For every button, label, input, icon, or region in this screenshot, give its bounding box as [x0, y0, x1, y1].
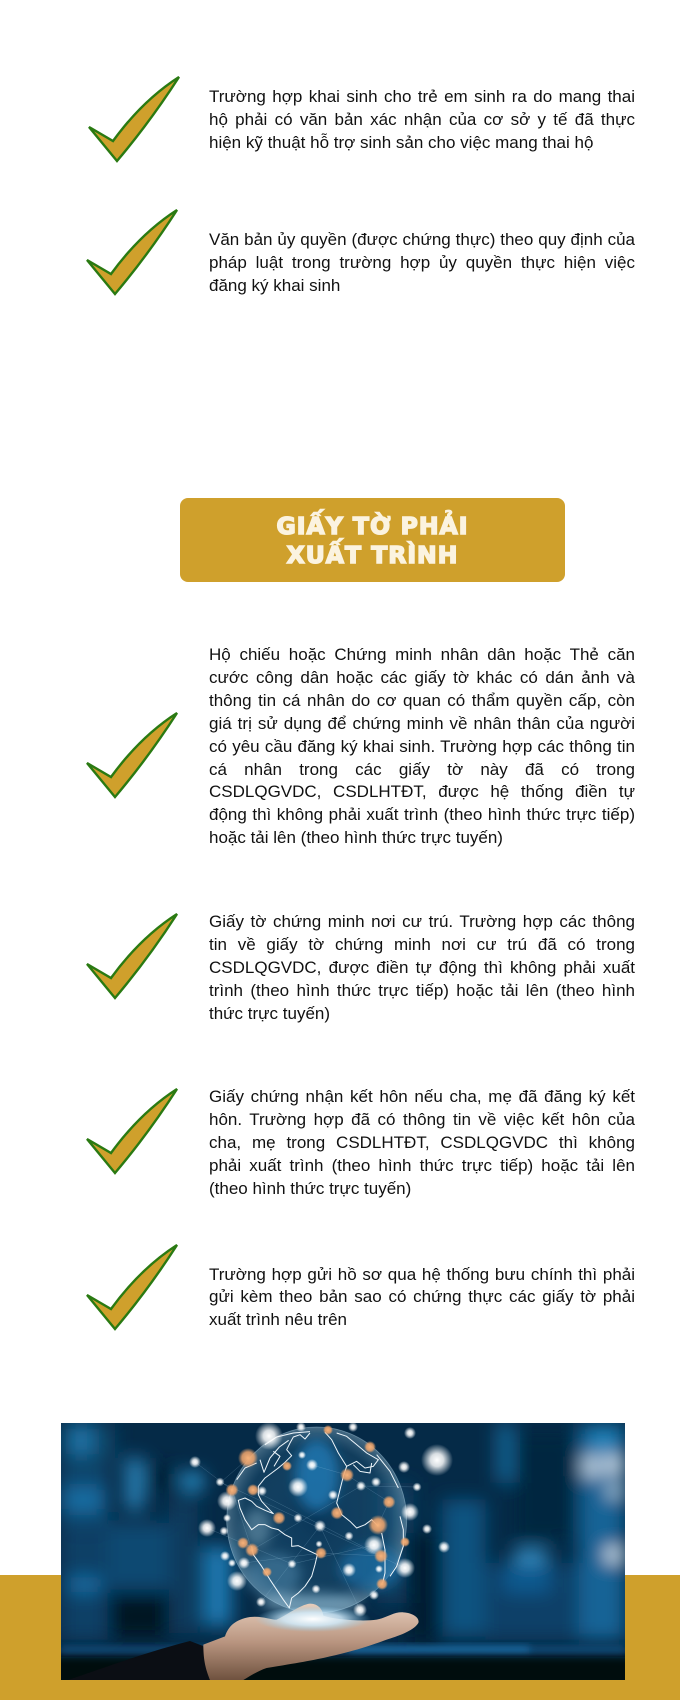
text: marriage certificate: Giấy chứng nhận kết hôn nếu cha, mẹ đã đăng ký kết	[209, 1087, 635, 1106]
text: identity documents: giá trị sử dụng để chứng minh về nhân thân của người	[209, 714, 635, 733]
text: identity documents: động thì không phải xuất trình (theo hình thức trực tiếp)	[209, 805, 635, 824]
icon: check mark 5	[86, 1088, 178, 1175]
text: first requirement: hiện kỹ thuật hỗ trợ sinh sản cho việc mang thai hộ	[209, 133, 593, 152]
text: second requirement: đăng ký khai sinh	[209, 276, 340, 295]
text: marriage certificate: cha, mẹ trong CSDLHTĐT, CSDLQGVDC thì không	[209, 1133, 635, 1152]
text: marriage certificate: hôn. Trường hợp đã có thông tin về việc kết hôn của	[209, 1110, 635, 1129]
globe	[195, 1427, 417, 1613]
text: identity documents: có yêu cầu đăng ký khai sinh. Trường hợp các thông tin	[209, 737, 635, 756]
text: residence documents: trình (theo hình thức trực tiếp) hoặc tải lên (theo hình	[209, 981, 635, 1000]
text: residence documents: Giấy tờ chứng minh nơi cư trú. Trường hợp các thông	[209, 912, 635, 931]
text: second requirement: pháp luật trong trường hợp ủy quyền thực hiện việc	[209, 253, 635, 272]
text: identity documents	[209, 645, 635, 847]
text: identity documents: hoặc tải lên (theo hình thức trực tuyến)	[209, 828, 503, 847]
text: second requirement: Văn bản ủy quyền (được chứng thực) theo quy định của	[209, 230, 635, 249]
text: postal submission	[209, 1264, 635, 1329]
continents	[237, 1432, 403, 1608]
text: postal submission: Trường hợp gửi hồ sơ qua hệ thống bưu chính thì phải	[209, 1264, 635, 1284]
network lines	[195, 1443, 417, 1610]
text: second requirement	[209, 230, 635, 295]
icon: check mark 2	[86, 209, 178, 296]
text: postal submission: xuất trình nêu trên	[209, 1310, 347, 1329]
palm glow	[255, 1606, 371, 1632]
text: residence documents	[209, 912, 635, 1023]
icon: check mark 1	[88, 76, 180, 163]
icon: check mark 6	[86, 1244, 178, 1331]
background	[61, 1423, 625, 1680]
heading: documents to present	[180, 498, 565, 582]
text: marriage certificate: phải xuất trình (theo hình thức trực tiếp) hoặc tải lên	[209, 1156, 635, 1175]
icon: check mark 3	[86, 712, 178, 799]
footer band	[0, 1575, 680, 1700]
floor glow	[61, 1646, 625, 1654]
text: first requirement: hộ phải có văn bản xác nhận của cơ sở y tế đã thực	[209, 110, 635, 129]
text: marriage certificate: (theo hình thức trực tuyến)	[209, 1179, 411, 1198]
text: identity documents: Hộ chiếu hoặc Chứng minh nhân dân hoặc Thẻ căn	[209, 645, 635, 664]
lights	[189, 1422, 453, 1617]
text: identity documents: cước công dân hoặc các giấy tờ khác có dán ảnh và	[209, 668, 635, 687]
text: first requirement	[209, 87, 635, 152]
heading: documents to present: XUẤT TRÌNH	[287, 541, 458, 569]
text: identity documents: thông tin cá nhân do cơ quan có thẩm quyền cấp, còn	[209, 691, 635, 710]
globe body	[227, 1427, 407, 1613]
text: residence documents: thức trực tuyến)	[209, 1004, 330, 1023]
icon: check mark 4	[86, 913, 178, 1000]
text: identity documents: CSDLQGVDC, CSDLHTĐT, được hệ thống điền tự	[209, 782, 635, 801]
text: residence documents: tin về giấy tờ chứng minh nơi cư trú đã có trong	[209, 935, 635, 954]
text: postal submission: gửi kèm theo bản sao có chứng thực các giấy tờ phải	[209, 1287, 635, 1306]
image: globe over a hand	[61, 1423, 625, 1680]
hand	[203, 1604, 419, 1680]
floor	[51, 1657, 635, 1687]
text: marriage certificate	[209, 1087, 635, 1198]
text: identity documents: cá nhân trong các giấy tờ này đã có trong	[209, 760, 635, 779]
sleeve	[68, 1641, 213, 1680]
text: first requirement: Trường hợp khai sinh cho trẻ em sinh ra do mang thai	[209, 87, 635, 106]
heading: documents to present: GIẤY TỜ PHẢI	[276, 512, 468, 540]
text: residence documents: CSDLQGVDC, được điền tự động thì không phải xuất	[209, 958, 635, 977]
